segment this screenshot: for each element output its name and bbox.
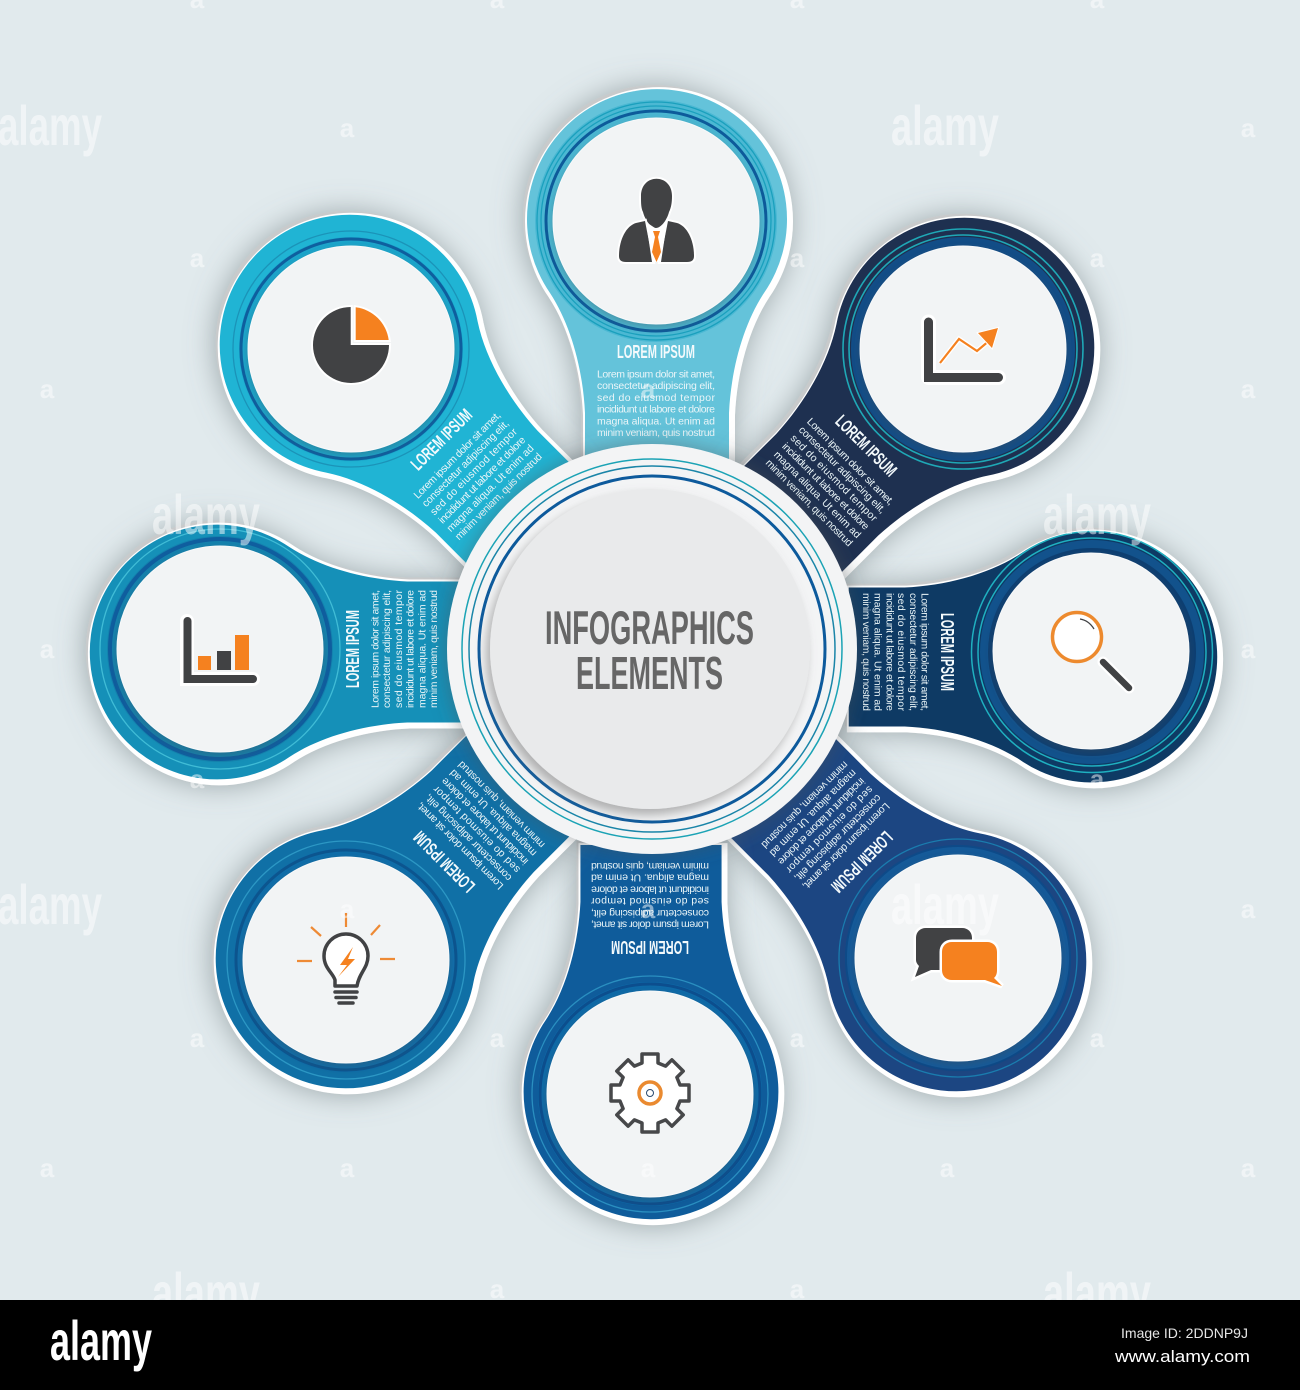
panel: petal right, magnifier: consectetur adipiscing elit,: [907, 593, 919, 711]
watermarks: a: [190, 764, 205, 794]
panel: petal left, bar chart: magna aliqua. Ut enim ad: [416, 590, 428, 708]
watermarks: a: [641, 894, 656, 924]
panel: petal bottom, gear: consectetur adipiscing elit,: [591, 907, 709, 919]
watermarks: a: [790, 1023, 805, 1053]
panel: petal lower right, chat: LOREM IPSUM: [827, 827, 896, 896]
panel: petal left, bar chart: sed do eiusmod tempor: [393, 590, 405, 708]
footer image id: Image ID: 2DDNP9J: [1121, 1325, 1248, 1341]
panel: petal top, person: consectetur adipiscing elit,: [597, 380, 715, 392]
panel: petal lower left, lightbulb: sed do eiusmod tempor: [430, 783, 523, 875]
title: [545, 601, 754, 699]
panel: petal upper right, growth chart: [692, 162, 1150, 620]
panel: petal left, bar chart: minim veniam, quis nostrud: [428, 590, 440, 708]
panel: petal lower left, lightbulb: magna aliqua. Ut enim ad: [447, 767, 539, 859]
watermarks: a: [340, 894, 355, 924]
title: ELEMENTS: [576, 647, 723, 699]
icon: pie chart: [313, 307, 389, 383]
watermarks: a: [1241, 894, 1256, 924]
watermarks: alamy: [152, 1261, 260, 1324]
watermarks: alamy: [891, 873, 999, 936]
panel: petal right, magnifier: minim veniam, quis nostrud: [860, 593, 872, 711]
watermarks: a: [1090, 1023, 1105, 1053]
icon: line chart: [928, 322, 998, 378]
panel: petal lower right, chat: Lorem ipsum dolor sit amet,: [800, 800, 892, 892]
panel: petal bottom, gear: magna aliqua. Ut enim ad: [591, 872, 709, 884]
icon: gear: [611, 1054, 689, 1132]
panel: petal lower left, lightbulb: minim veniam, quis nostrud: [455, 758, 548, 850]
watermarks: a: [40, 1153, 55, 1183]
panel: petal top, person: minim veniam, quis nostrud: [597, 427, 715, 439]
watermarks: a: [1241, 1153, 1256, 1183]
icon: chat bubbles: [915, 928, 1002, 986]
footer bar: [0, 1300, 1300, 1390]
panel: petal lower right, chat: sed do eiusmod tempor: [783, 783, 875, 876]
watermarks: a: [1090, 243, 1105, 273]
panel: petal upper right, growth chart: incididunt ut labore et dolore: [779, 441, 871, 533]
watermarks: a: [340, 1153, 355, 1183]
panel: petal right, magnifier: sed do eiusmod tempor: [895, 593, 907, 712]
panel: petal lower right, chat: [684, 689, 1142, 1147]
panel: petal right, magnifier: magna aliqua. Ut enim ad: [872, 593, 884, 711]
watermarks: a: [40, 374, 55, 404]
watermarks: a: [1241, 374, 1256, 404]
panel: petal right, magnifier: LOREM IPSUM: [937, 613, 957, 691]
watermarks: a: [190, 1023, 205, 1053]
watermarks: a: [641, 1153, 656, 1183]
panel: petal lower left, lightbulb: LOREM IPSUM: [410, 827, 479, 896]
panel: petal upper right, growth chart: minim veniam, quis nostrud: [763, 457, 855, 549]
panel: petal top, person: sed do eiusmod tempor: [597, 392, 716, 404]
watermarks: alamy: [1043, 483, 1151, 546]
watermarks: alamy: [1043, 1261, 1151, 1324]
panel: petal lower left, lightbulb: consectetur adipiscing elit,: [423, 792, 514, 883]
icon: magnifier: [1052, 612, 1129, 688]
panel: petal lower right, chat: minim veniam, quis nostrud: [758, 759, 851, 851]
panel: petal bottom, gear: minim veniam, quis nostrud: [591, 860, 709, 872]
panel: petal upper right, growth chart: LOREM IPSUM: [831, 411, 901, 481]
panel: petal upper right, growth chart: sed do eiusmod tempor: [788, 432, 880, 525]
panel: petal top, person: incididunt ut labore et dolore: [597, 404, 715, 416]
panel: petal top, person: Lorem ipsum dolor sit amet,: [597, 368, 715, 380]
panel: petal lower left, lightbulb: [160, 686, 618, 1144]
watermarks: a: [940, 1153, 955, 1183]
panel: petal bottom, gear: sed do eiusmod tempor: [590, 895, 709, 907]
watermarks: alamy: [0, 94, 102, 157]
panel: petal left, bar chart: Lorem ipsum dolor sit amet,: [370, 590, 382, 708]
watermarks: a: [490, 1023, 505, 1053]
panel: petal bottom, gear: Lorem ipsum dolor sit amet,: [591, 918, 709, 930]
panel: petal upper left, pie chart: incididunt ut labore et dolore: [436, 434, 528, 526]
panel: petal top, person: magna aliqua. Ut enim ad: [597, 415, 715, 427]
watermarks: a: [790, 1274, 805, 1304]
icon: bar chart: [187, 621, 253, 679]
watermarks: a: [340, 113, 355, 143]
title: INFOGRAPHICS: [545, 601, 754, 654]
panel: petal lower right, chat: consectetur adipiscing elit,: [792, 792, 884, 884]
icon discs: [117, 118, 1189, 1197]
watermarks: a: [1241, 113, 1256, 143]
centre panel: [447, 444, 857, 854]
watermarks: a: [641, 374, 656, 404]
panel: petal upper left, pie chart: minim veniam, quis nostrud: [453, 451, 545, 543]
watermarks: a: [1241, 634, 1256, 664]
watermarks: a: [40, 634, 55, 664]
panel: petal upper left, pie chart: sed do eiusmod tempor: [428, 426, 520, 518]
panel: petal top, person: [525, 87, 789, 473]
panel: petal bottom, gear: LOREM IPSUM: [611, 937, 689, 957]
watermarks: a: [790, 243, 805, 273]
panel: petal lower left, lightbulb: Lorem ipsum dolor sit amet,: [414, 800, 506, 892]
panel: petal upper left, pie chart: Lorem ipsum dolor sit amet,: [411, 409, 503, 501]
panel: petal upper left, pie chart: consectetur adipiscing elit,: [420, 418, 512, 510]
panel: petal right, magnifier: incididunt ut labore et dolore: [883, 593, 895, 711]
icon: lightbulb: [297, 913, 395, 1003]
panel: petal left, bar chart: LOREM IPSUM: [343, 610, 363, 688]
panel: petal left, bar chart: consectetur adipiscing elit,: [381, 590, 393, 708]
panel: petal upper left, pie chart: magna aliqua. Ut enim ad: [445, 442, 537, 534]
panel: petal bottom, gear: [522, 843, 780, 1221]
panel: petal right, magnifier: [847, 530, 1219, 784]
icon: person: [619, 179, 694, 262]
watermarks: a: [490, 1274, 505, 1304]
panel: petal upper right, growth chart: consectetur adipiscing elit,: [796, 424, 888, 516]
panel: petal upper right, growth chart: Lorem ipsum dolor sit amet,: [804, 416, 896, 508]
watermarks: a: [190, 243, 205, 273]
panel: petal left, bar chart: [88, 523, 466, 781]
watermarks: alamy: [0, 873, 102, 936]
panel: petal lower right, chat: incididunt ut labore et dolore: [775, 775, 867, 867]
panel: petal upper right, growth chart: magna aliqua. Ut enim ad: [771, 449, 863, 541]
panel: petal lower right, chat: magna aliqua. Ut enim ad: [767, 767, 859, 859]
watermarks: a: [1090, 764, 1105, 794]
panel: petal upper left, pie chart: [164, 159, 622, 617]
panel: petal lower left, lightbulb: incididunt ut labore et dolore: [439, 775, 531, 867]
watermarks: alamy: [891, 94, 999, 157]
footer url: www.alamy.com: [1114, 1347, 1250, 1366]
panel: petal left, bar chart: incididunt ut labore et dolore: [405, 590, 417, 708]
panel: petal right, magnifier: Lorem ipsum dolor sit amet,: [918, 593, 930, 711]
footer logo: alamy: [50, 1309, 152, 1372]
panel: petal top, person: LOREM IPSUM: [617, 342, 695, 362]
panel: petal bottom, gear: incididunt ut labore et dolore: [591, 883, 709, 895]
watermarks: alamy: [152, 483, 260, 546]
panel: petal upper left, pie chart: LOREM IPSUM: [407, 405, 476, 474]
